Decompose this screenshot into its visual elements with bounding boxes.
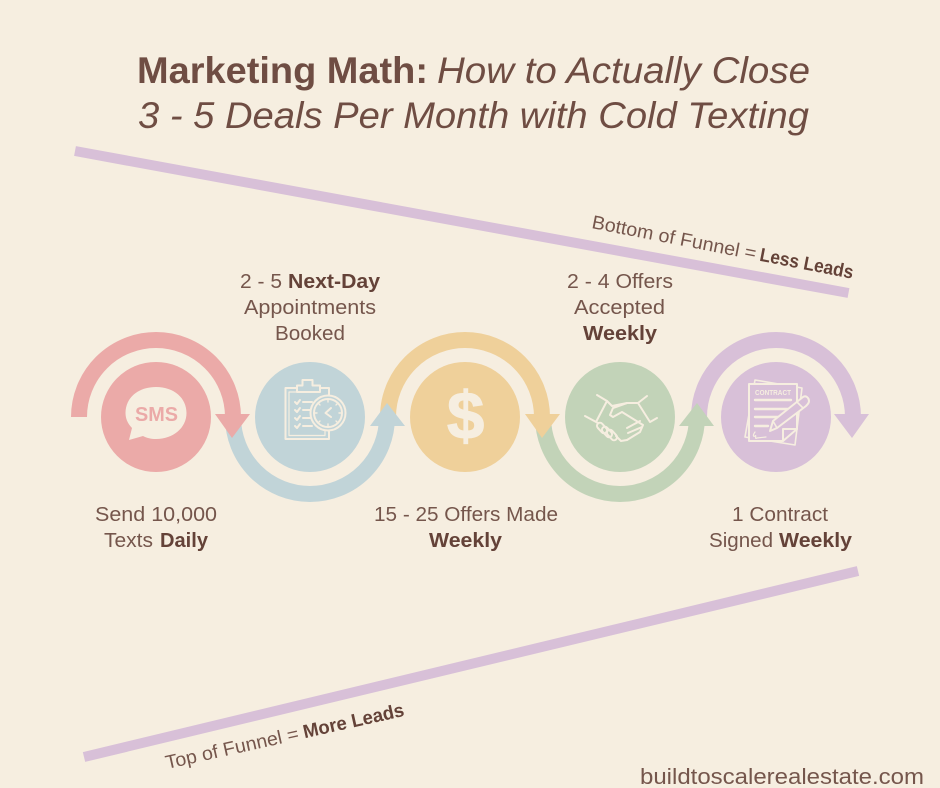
step 1 circle with SMS icon: SMS [135, 404, 178, 426]
step 3 circle with dollar icon: $ [447, 378, 484, 454]
title [137, 50, 810, 136]
text: step 3: 15 - 25 Offers Made [374, 504, 558, 526]
title: Marketing Math: [137, 50, 428, 91]
funnel line: bottom [84, 571, 858, 757]
text: step 2: 2 - 5 [240, 271, 282, 293]
text: step 4 [567, 271, 673, 345]
label: bottom of funnel [590, 212, 855, 284]
label: top of funnel [164, 700, 406, 774]
step 5 circle with contract icon [721, 362, 831, 472]
text: step 1 [95, 504, 217, 552]
text: step 5: Signed [709, 530, 773, 552]
text: step 5: 1 Contract [732, 504, 828, 526]
label: bottom of funnel: Bottom of Funnel = [590, 212, 758, 265]
text: step 1: Daily [160, 530, 209, 552]
text: step 4: 2 - 4 Offers [567, 271, 673, 293]
text: step 5 [709, 504, 853, 552]
text: step 1: Send 10,000 [95, 504, 217, 526]
arrow: yellow arc [388, 340, 560, 438]
step 3 circle with dollar icon [410, 362, 520, 472]
text: step 3: Weekly [429, 530, 503, 552]
text: step 4: Weekly [583, 323, 658, 345]
label: bottom of funnel: Less Leads [758, 245, 855, 284]
funnel line: top [75, 151, 848, 293]
text: step 2: Next-Day [288, 271, 381, 293]
text: step 4: Accepted [574, 297, 665, 319]
step 5 circle with contract icon: CONTRACT [755, 388, 791, 397]
title: 3 - 5 Deals Per Month with Cold Texting [138, 95, 809, 136]
step 1 circle with SMS icon [101, 362, 211, 472]
text: step 3 [374, 504, 558, 552]
step 2 circle with clipboard and clock icon [255, 362, 365, 472]
step 4 circle with handshake icon [565, 362, 675, 472]
label: top of funnel: More Leads [301, 700, 406, 743]
text: step 1: Texts [104, 530, 153, 552]
text: step 5: Weekly [779, 530, 853, 552]
text: step 2 [240, 271, 381, 345]
label: top of funnel: Top of Funnel = [164, 724, 301, 774]
arrow: green arc [543, 403, 714, 494]
arrow: pink arc [79, 340, 250, 438]
text: step 2: Booked [275, 323, 345, 345]
text: step 2: Appointments [244, 297, 376, 319]
arrow: purple arc [699, 340, 869, 438]
arrow: blue arc [233, 403, 405, 494]
title: How to Actually Close [437, 50, 810, 91]
